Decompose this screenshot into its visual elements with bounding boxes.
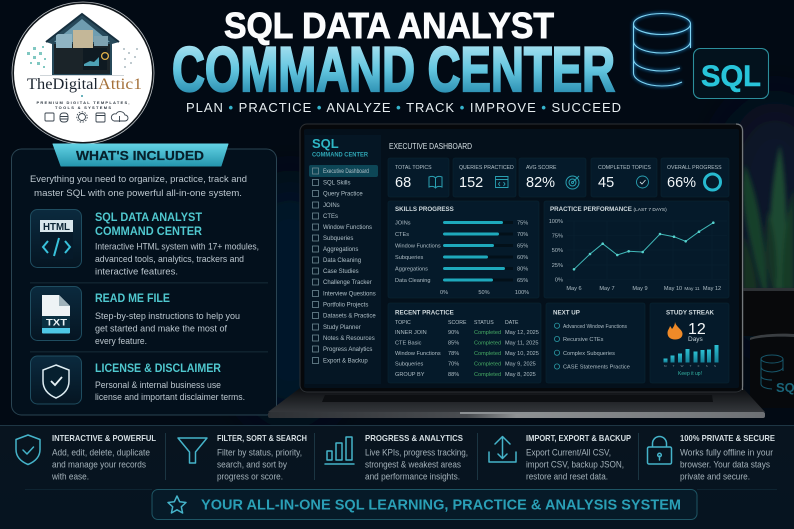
item: read me file: every feature. xyxy=(95,336,147,347)
item: command center file xyxy=(30,210,259,278)
panel: recent practice table: Window Functions xyxy=(395,351,441,357)
panel: next up: Advanced Window Functions xyxy=(563,324,627,330)
panel: recent practice table: Completed xyxy=(474,340,501,346)
logo badge: TheDigitalAttic1 xyxy=(12,2,154,144)
panel: study streak: Days xyxy=(688,336,704,343)
feature: progress and analytics xyxy=(325,433,468,482)
panel: recent practice table: 90% xyxy=(448,330,459,336)
panel: skills progress chart: 60% xyxy=(517,255,528,261)
feature: import, export and backup: restore and reset data. xyxy=(526,472,608,482)
panel: skills progress chart: Window Functions xyxy=(395,244,441,250)
panel: practice performance line chart: May 10 xyxy=(664,286,682,292)
sidebar: Challenge Tracker xyxy=(323,280,372,286)
panel: skills progress chart: Subqueries xyxy=(395,255,424,261)
kpi: avg score: 82% xyxy=(526,175,555,191)
item: read me file: get started and make the most of xyxy=(95,324,227,334)
panel: skills progress chart: Data Cleaning xyxy=(395,278,430,284)
panel: practice performance line chart: 50% xyxy=(552,248,563,254)
item: command center file: interactive features. xyxy=(95,266,178,278)
panel: practice performance line chart: 0% xyxy=(555,278,563,284)
panel: skills progress chart: 70% xyxy=(517,232,528,238)
laptop base xyxy=(268,388,765,418)
panel: recent practice table: May 8, 2025 xyxy=(505,372,536,378)
kpi: overall progress: 66% xyxy=(667,175,696,191)
icon: txt file: TXT xyxy=(46,318,67,328)
item: command center file: advanced tools, analytics, trackers and xyxy=(95,254,244,265)
feature: progress and analytics: PROGRESS & ANALYTICS xyxy=(365,433,463,443)
feature: interactive and powerful: with ease. xyxy=(51,472,89,482)
sidebar: Query Practice xyxy=(323,192,363,198)
panel: recent practice table: Completed xyxy=(474,362,501,368)
title: COMMAND CENTER xyxy=(172,35,615,105)
panel: skills progress chart: 100% xyxy=(515,290,529,296)
panel: skills progress chart: 75% xyxy=(517,220,528,226)
panel: recent practice table: 85% xyxy=(448,340,459,346)
kpi: queries practiced xyxy=(453,158,516,197)
panel: recent practice table: TOPIC xyxy=(395,320,411,326)
sidebar: Aggregations xyxy=(323,247,358,253)
panel: next up: CASE Statements Practice xyxy=(563,364,630,370)
panel: recent practice table: SCORE xyxy=(448,320,467,326)
logo badge: TheDigitalAttic1: TheDigital xyxy=(27,76,98,93)
logo badge: TheDigitalAttic1: TOOLS & SYSTEMS xyxy=(55,105,111,110)
panel: skills progress chart: JOINs xyxy=(395,220,411,226)
laptop xyxy=(268,124,765,418)
panel: recent practice table: May 11, 2025 xyxy=(505,340,538,346)
panel: next up: Recursive CTEs xyxy=(563,337,604,343)
sidebar: Notes & Resources xyxy=(323,336,375,342)
laptop lid xyxy=(300,124,743,392)
panel: recent practice table: DATE xyxy=(505,320,519,326)
footer feature strip xyxy=(0,425,794,529)
banner: what's included xyxy=(53,144,228,166)
panel: study streak: M T W T F S S xyxy=(664,364,716,368)
panel: recent practice table: Completed xyxy=(474,372,501,378)
feature: progress and analytics: strongest & weakest areas xyxy=(365,460,462,470)
plant xyxy=(743,145,794,290)
panel: practice performance line chart: May 9 xyxy=(632,286,648,292)
feature: private and secure: 100% PRIVATE & SECURE xyxy=(680,433,775,443)
intro text: Everything you need to organize, practice, track and xyxy=(30,174,247,185)
mug with SQL logo xyxy=(750,334,794,408)
panel: practice performance line chart: May 11 xyxy=(684,286,700,292)
panel: recent practice table: RECENT PRACTICE xyxy=(395,310,454,316)
panel: skills progress chart: 50% xyxy=(478,290,490,296)
panel: recent practice table: Completed xyxy=(474,351,501,357)
panel: next up: Complex Subqueries xyxy=(563,351,615,357)
panel: study streak: 12 xyxy=(688,321,706,338)
item: command center file: Interactive HTML system with 17+ modules, xyxy=(95,242,259,252)
item: read me file: Step-by-step instructions to help you xyxy=(95,311,240,322)
panel: recent practice table: CTE Basic xyxy=(395,340,422,346)
panel: skills progress chart: 65% xyxy=(517,278,528,284)
item: read me file xyxy=(30,286,240,347)
kpi: completed topics: COMPLETED TOPICS xyxy=(598,165,651,171)
panel: recent practice table: STATUS xyxy=(474,320,494,326)
panel: next up xyxy=(546,303,645,383)
feature: filter, sort and search xyxy=(178,433,307,482)
item: license and disclaimer: Personal & internal business use xyxy=(95,380,221,391)
panel: recent practice table: May 10, 2025 xyxy=(505,351,539,357)
feature: progress and analytics: and performance insights. xyxy=(365,472,460,482)
panel: skills progress chart: CTEs xyxy=(395,232,409,238)
feature: import, export and backup: Export Current/All CSV, xyxy=(526,448,611,458)
logo badge: TheDigitalAttic1: Attic1 xyxy=(98,76,142,93)
sidebar: Window Functions xyxy=(323,225,372,231)
item: license and disclaimer xyxy=(30,356,245,404)
feature: interactive and powerful xyxy=(16,433,156,482)
kpi: completed topics xyxy=(591,158,657,197)
panel: practice performance line chart: 25% xyxy=(552,263,563,269)
panel: recent practice table: GROUP BY xyxy=(395,372,425,378)
panel: skills progress chart: 65% xyxy=(517,244,528,250)
kpi: overall progress: OVERALL PROGRESS xyxy=(667,165,722,171)
panel: recent practice table: May 12, 2025 xyxy=(505,330,539,336)
item: command center file: COMMAND CENTER xyxy=(95,224,202,238)
icon: SQL badge: SQL xyxy=(701,60,761,93)
sidebar: CTEs xyxy=(323,214,338,220)
kpi: total topics: 68 xyxy=(395,175,411,191)
tagline: PLAN • PRACTICE • ANALYZE • TRACK • IMPROVE • SUCCEED xyxy=(186,100,621,115)
panel: study streak xyxy=(650,303,729,383)
kpi: queries practiced: 152 xyxy=(459,175,483,191)
panel: recent practice table xyxy=(388,303,541,383)
panel: recent practice table: Subqueries xyxy=(395,362,424,368)
panel: skills progress chart: SKILLS PROGRESS xyxy=(395,206,454,213)
panel: skills progress chart: 0% xyxy=(440,290,448,296)
sidebar: Interview Questions xyxy=(323,292,376,298)
kpi: avg score: AVG SCORE xyxy=(526,165,557,171)
sidebar: COMMAND CENTER xyxy=(312,152,368,158)
sidebar: SQL Skills xyxy=(323,180,350,186)
kpi: total topics: TOTAL TOPICS xyxy=(395,165,432,171)
pot xyxy=(743,289,794,336)
item: read me file: READ ME FILE xyxy=(95,291,170,305)
panel: practice performance line chart: May 6 xyxy=(566,286,582,292)
title: SQL DATA ANALYST xyxy=(224,5,554,46)
item: command center file: SQL DATA ANALYST xyxy=(95,210,203,224)
panel: practice performance line chart: PRACTICE PERFORMANCE (LAST 7 DAYS) xyxy=(550,206,667,213)
item: license and disclaimer: LICENSE & DISCLAIMER xyxy=(95,361,221,375)
feature: filter, sort and search: FILTER, SORT & SEARCH xyxy=(217,433,307,443)
icon: html file xyxy=(30,210,82,268)
panel: what's included xyxy=(12,144,276,415)
icon: shield check xyxy=(30,356,82,404)
sidebar xyxy=(305,135,381,384)
banner: what's included: WHAT'S INCLUDED xyxy=(76,149,204,163)
sidebar: SQL xyxy=(312,136,339,151)
icon: database cylinder xyxy=(634,14,690,86)
sidebar: Portfolio Projects xyxy=(323,302,368,308)
panel: study streak: STUDY STREAK xyxy=(666,310,715,316)
panel: recent practice table: 78% xyxy=(448,351,459,357)
kpi: avg score xyxy=(519,158,586,197)
feature: private and secure xyxy=(648,433,775,482)
feature: filter, sort and search: progress or score. xyxy=(217,472,283,482)
feature: import, export and backup: import CSV, backup JSON, xyxy=(526,460,624,470)
sidebar: Export & Backup xyxy=(323,358,368,364)
feature: filter, sort and search: search, and sort by xyxy=(217,460,288,470)
bottom slogan banner xyxy=(152,490,697,520)
icon: txt file xyxy=(30,286,82,340)
panel: practice performance line chart: May 7 xyxy=(599,286,615,292)
feature: private and secure: browser. Your data stays xyxy=(680,460,771,470)
intro text xyxy=(30,174,247,199)
icon: SQL badge xyxy=(694,48,768,98)
panel: next up: NEXT UP xyxy=(553,310,580,316)
panel: recent practice table: May 9, 2025 xyxy=(505,362,536,368)
feature: progress and analytics: Live KPIs, progress tracking, xyxy=(365,448,468,458)
item: license and disclaimer: license and important disclaimer terms. xyxy=(95,392,245,403)
sidebar: Datasets & Practice xyxy=(323,314,376,320)
sidebar: JOINs xyxy=(323,203,340,209)
panel: study streak: Keep it up! xyxy=(678,371,702,377)
feature: filter, sort and search: Filter by status, priority, xyxy=(217,448,302,458)
feature: interactive and powerful: INTERACTIVE & POWERFUL xyxy=(52,433,156,443)
panel: recent practice table: Completed xyxy=(474,330,501,336)
icon: flame xyxy=(668,322,683,340)
icon: html file: HTML xyxy=(43,222,70,233)
dashboard heading: EXECUTIVE DASHBOARD xyxy=(389,142,472,151)
feature: interactive and powerful: Add, edit, delete, duplicate xyxy=(52,448,150,458)
kpi: overall progress xyxy=(661,158,729,197)
panel: practice performance line chart: 100% xyxy=(549,219,563,225)
panel: practice performance line chart xyxy=(544,201,729,298)
kpi: total topics xyxy=(388,158,449,197)
sidebar: Case Studies xyxy=(323,269,359,275)
sidebar: Study Planner xyxy=(323,325,361,331)
feature: private and secure: Works fully offline in your xyxy=(680,448,773,458)
sidebar: Executive Dashboard xyxy=(323,169,369,175)
intro text: master SQL with one powerful all-in-one system. xyxy=(34,188,242,199)
logo badge: TheDigitalAttic1: PREMIUM DIGITAL TEMPLATES, xyxy=(36,100,130,105)
feature: private and secure: private and secure. xyxy=(680,472,750,482)
panel: recent practice table: 88% xyxy=(448,372,459,378)
panel: recent practice table: INNER JOIN xyxy=(395,330,427,336)
panel: practice performance line chart: 75% xyxy=(552,234,563,240)
sidebar: Progress Analytics xyxy=(323,347,372,353)
bottom slogan banner: YOUR ALL-IN-ONE SQL LEARNING, PRACTICE & ANALYSIS SYSTEM xyxy=(201,498,681,514)
kpi: queries practiced: QUERIES PRACTICED xyxy=(459,165,514,171)
feature: interactive and powerful: and manage your records xyxy=(52,460,147,470)
panel: recent practice table: 70% xyxy=(448,362,459,368)
panel: skills progress chart xyxy=(388,201,539,298)
feature: import, export and backup xyxy=(489,433,631,482)
title xyxy=(172,5,615,105)
panel: practice performance line chart: May 12 xyxy=(703,286,721,292)
kpi: completed topics: 45 xyxy=(598,175,614,191)
feature: import, export and backup: IMPORT, EXPORT & BACKUP xyxy=(526,433,631,443)
sidebar: Subqueries xyxy=(323,236,353,242)
sidebar: Data Cleaning xyxy=(323,258,361,264)
panel: skills progress chart: Aggregations xyxy=(395,266,428,272)
panel: skills progress chart: 80% xyxy=(517,266,528,272)
